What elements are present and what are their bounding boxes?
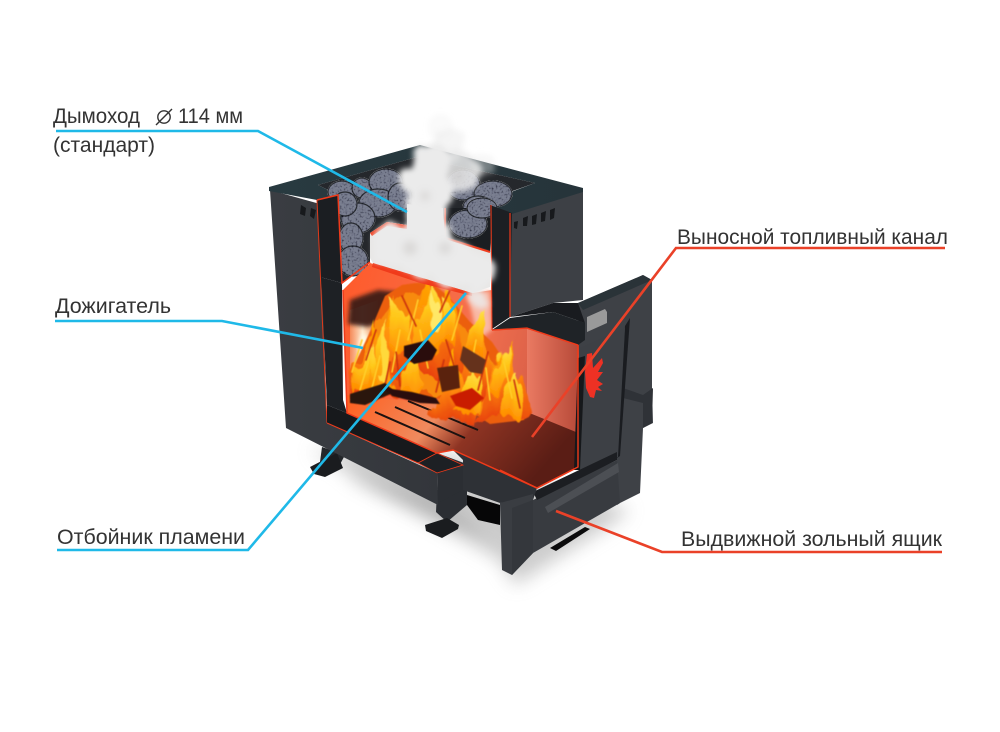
left wall cut section bbox=[317, 195, 370, 423]
callout: flue: 114 мм bbox=[178, 105, 243, 128]
drawer handle bbox=[545, 463, 619, 513]
top plate bbox=[269, 145, 583, 214]
right wall cut section bbox=[490, 205, 512, 330]
diameter symbol bbox=[156, 109, 172, 125]
callout: flame baffle bbox=[57, 293, 466, 550]
firebox interior bbox=[343, 263, 578, 488]
base box section bbox=[418, 450, 537, 503]
ground shadow bbox=[310, 450, 630, 585]
grate bars bbox=[375, 401, 478, 445]
right door frame bbox=[578, 275, 653, 505]
callout: flue bbox=[53, 105, 407, 212]
feet and supports bbox=[310, 447, 590, 551]
red section edges bbox=[343, 290, 578, 488]
callout: flame baffle: Отбойник пламени bbox=[57, 526, 245, 549]
steam plume bbox=[370, 116, 496, 307]
rooster marks bbox=[300, 205, 555, 229]
dark band below firebox bbox=[327, 405, 437, 463]
ash drawer bbox=[533, 452, 620, 553]
afterburner plate bbox=[350, 300, 378, 400]
back wall of chamber bbox=[527, 328, 578, 432]
dark slit beside door bbox=[574, 356, 585, 470]
sauna rocks bbox=[328, 169, 512, 276]
chimney channel section bbox=[370, 204, 490, 296]
callout: flue: Дымоход bbox=[53, 105, 140, 128]
pale steam glow by baffle bbox=[468, 290, 492, 340]
logs bbox=[350, 383, 395, 405]
callout: afterburner: Дожигатель bbox=[55, 295, 171, 318]
callout: remote fuel channel: Выносной топливный канал bbox=[677, 226, 948, 249]
front corner post bbox=[500, 494, 533, 575]
section edge of fuel channel bbox=[500, 345, 578, 488]
callout: ash drawer bbox=[556, 511, 943, 552]
icon: red phoenix emblem bbox=[585, 353, 603, 398]
shelf over fuel channel bbox=[492, 303, 585, 345]
callout: remote fuel channel bbox=[532, 226, 948, 437]
callout: afterburner bbox=[55, 295, 363, 348]
rocks opening back wall bbox=[318, 157, 535, 283]
badge plate bbox=[587, 309, 607, 332]
callout: flue: (стандарт) bbox=[53, 134, 155, 157]
firebox floor bbox=[347, 395, 578, 488]
callout: ash drawer: Выдвижной зольный ящик bbox=[681, 528, 943, 551]
smoke shading bbox=[403, 170, 464, 255]
lug on frame bbox=[623, 388, 653, 428]
flames bbox=[350, 270, 532, 424]
right box with rocks bbox=[445, 198, 497, 252]
door leaf bbox=[580, 328, 625, 473]
flame streaks bbox=[352, 290, 520, 408]
stove bbox=[269, 116, 653, 575]
left outer wall bbox=[270, 190, 438, 505]
right outer wall bbox=[510, 190, 583, 317]
